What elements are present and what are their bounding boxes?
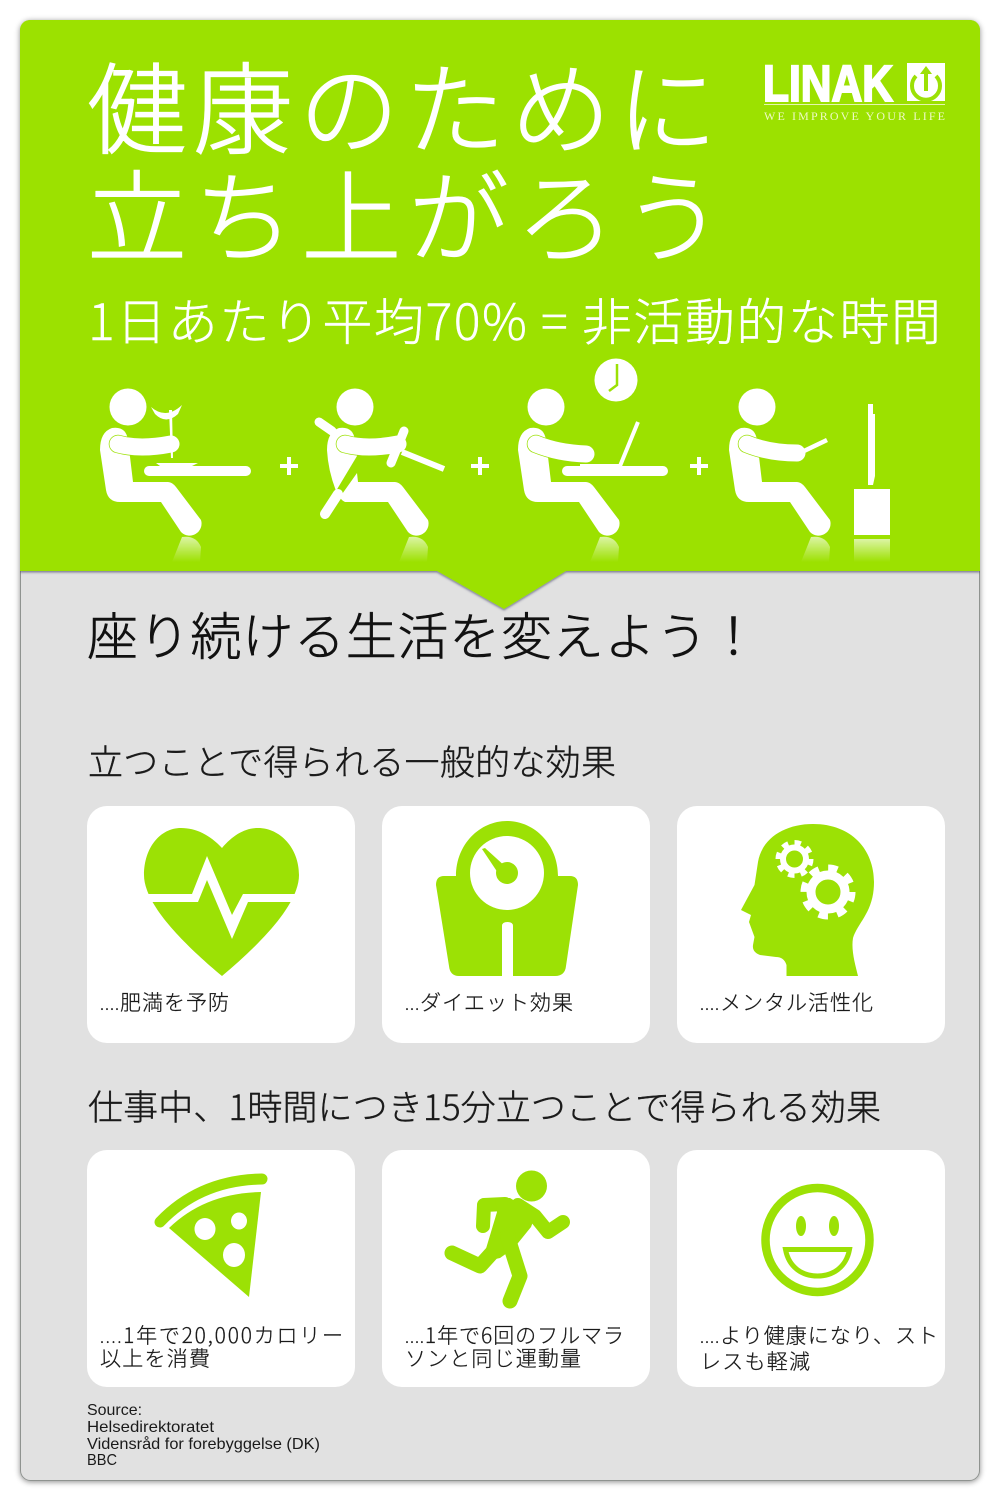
logo: LINAK: WE IMPROVE YOUR LIFE	[764, 109, 945, 123]
icon: smiley	[766, 1188, 870, 1292]
title	[87, 30, 723, 283]
icon: person at laptop with clock	[518, 358, 668, 562]
text: calories: ....1年で20,000カロリー	[100, 1320, 343, 1350]
heading: change sedentary life: 座り続ける生活を変えよう！	[87, 596, 759, 670]
panel: green header	[20, 20, 980, 609]
text: calories: 以上を消費	[100, 1343, 210, 1373]
title: 立ち上がろう	[87, 138, 723, 283]
heading: benefits of standing 15 minutes: 仕事中、1時間につき15分立つことで得られる効果	[88, 1080, 881, 1131]
logo: LINAK: LINAK	[763, 55, 893, 112]
source text: Vidensråd for forebyggelse (DK)	[87, 1435, 320, 1453]
icon: person watching TV	[729, 388, 890, 562]
icon: pizza slice	[160, 1179, 262, 1297]
text: prevent obesity: ....肥満を予防	[100, 987, 229, 1017]
icon: person eating	[100, 388, 251, 562]
text: calories	[100, 1320, 343, 1373]
text: mental activation: ....メンタル活性化	[700, 987, 873, 1017]
icon: weighing scale	[436, 821, 578, 976]
text: healthier, less stress: ....より健康になり、スト	[700, 1320, 938, 1350]
source text: Helsedirektoratet	[87, 1419, 215, 1436]
text: marathons: ソンと同じ運動量	[405, 1343, 581, 1373]
text: diet effect: ...ダイエット効果	[405, 987, 573, 1017]
plus sign	[471, 457, 489, 475]
source text: BBC	[87, 1452, 117, 1469]
text: marathons: ....1年で6回のフルマラ	[405, 1320, 624, 1350]
card: prevent obesity	[87, 806, 355, 1043]
text: marathons	[405, 1320, 624, 1373]
icon: head with gears	[741, 824, 874, 976]
card: healthier, less stress	[677, 1150, 945, 1387]
source text: Source:	[87, 1402, 142, 1419]
icon: person driving	[319, 388, 444, 562]
card: mental activation	[677, 806, 945, 1043]
text: healthier, less stress	[700, 1320, 938, 1376]
subtitle: 1日あたり平均70% = 非活動的な時間	[88, 283, 941, 355]
card: diet effect	[382, 806, 650, 1043]
title: 健康のために	[87, 30, 717, 175]
icon: runner	[452, 1170, 563, 1301]
text: healthier, less stress: レスも軽減	[700, 1346, 810, 1376]
heading: general benefits: 立つことで得られる一般的な効果	[88, 735, 616, 786]
plus sign	[690, 457, 708, 475]
card: marathons	[382, 1150, 650, 1387]
plus sign	[280, 457, 298, 475]
source text	[87, 1402, 320, 1469]
card: calories	[87, 1150, 355, 1387]
icon: heart with pulse	[140, 828, 302, 976]
